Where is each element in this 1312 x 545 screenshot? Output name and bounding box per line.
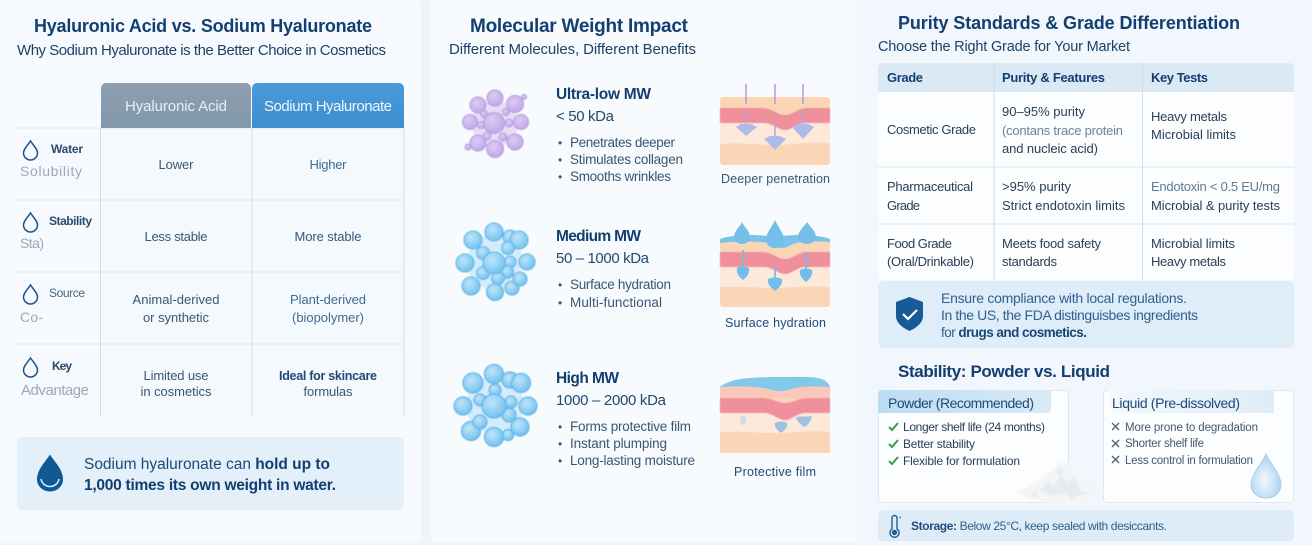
title: Hyaluronic Acid vs. Sodium Hyaluronate: [34, 16, 372, 36]
card: powder: Better stability: [903, 437, 975, 451]
row: medium molecular weight: •: [558, 278, 562, 292]
row: source: Plant-derived: [290, 292, 366, 307]
row: source: or synthetic: [143, 310, 210, 325]
row: source: Source: [49, 286, 85, 300]
icon: thermometer: [890, 516, 901, 537]
storage note: [878, 510, 1294, 541]
row: cosmetic grade: Heavy metals: [1151, 109, 1228, 124]
row: key advantage: Key: [52, 359, 72, 373]
row: food grade: Heavy metals: [1151, 254, 1226, 269]
row: high molecular weight: •: [558, 454, 562, 468]
row: key advantage: in cosmetics: [140, 384, 212, 399]
icon: powder pile: [1017, 462, 1105, 503]
row: ultra-low molecular weight: Stimulates collagen: [570, 152, 683, 167]
row: key advantage: Advantage: [21, 382, 89, 399]
row: key advantage: formulas: [304, 384, 353, 399]
callout: water holding: Sodium hyaluronate can hold up to: [84, 456, 330, 473]
icon: blue molecule cluster: [456, 223, 535, 300]
table header: [887, 70, 1208, 85]
title: Molecular Weight Impact: [470, 16, 689, 37]
card: liquid: Liquid (Pre-dissolved): [1112, 395, 1240, 411]
row: ultra-low molecular weight: •: [558, 153, 562, 167]
row: stability: Stability: [49, 214, 92, 228]
row: key advantage: Ideal for skincare: [279, 369, 377, 383]
icon: shield with check: [896, 297, 923, 331]
row: medium molecular weight: Medium MW: [556, 228, 641, 245]
row: high molecular weight: High MW: [556, 370, 619, 387]
row: source: [20, 285, 366, 325]
card: liquid: More prone to degradation: [1125, 422, 1258, 434]
row: cosmetic grade: [887, 104, 1236, 156]
row: key advantage: [21, 358, 377, 399]
row: ultra-low molecular weight: Smooths wrinkles: [570, 169, 671, 184]
row: high molecular weight: •: [558, 437, 562, 451]
row: food grade: standards: [1002, 254, 1058, 269]
row: cosmetic grade: Microbial limits: [1151, 127, 1236, 142]
row: water solubility: Solubility: [20, 163, 82, 179]
row: cosmetic grade: 90–95% purity: [1002, 104, 1086, 119]
row: ultra-low molecular weight: < 50 kDa: [556, 108, 615, 125]
row: food grade: Food Grade: [887, 236, 952, 251]
subtitle: Different Molecules, Different Benefits: [449, 41, 696, 58]
row: pharmaceutical grade: Grade: [887, 198, 920, 213]
panel: purity standards and stability: [857, 0, 1312, 545]
row: key advantage: Limited use: [144, 368, 208, 383]
icon: x marks: [1112, 423, 1119, 463]
row: ultra-low molecular weight: •: [558, 170, 562, 184]
row: medium molecular weight: •: [558, 296, 562, 310]
callout: water holding: 1,000 times its own weight in water.: [84, 477, 336, 494]
card: powder: Powder (Recommended): [888, 395, 1034, 411]
card: powder: Flexible for formulation: [903, 454, 1020, 468]
row: medium molecular weight: Surface hydration: [570, 277, 671, 292]
row: pharmaceutical grade: Strict endotoxin limits: [1002, 198, 1126, 213]
panel: molecular weight impact: [431, 0, 856, 543]
caption: Surface hydration: [725, 316, 826, 330]
callout: regulatory compliance: In the US, the FDA distinguisbes ingredients: [941, 307, 1198, 323]
row: stability: Sta): [20, 235, 44, 251]
row: food grade: [887, 236, 1236, 269]
row: pharmaceutical grade: [887, 179, 1280, 213]
subtitle: Why Sodium Hyaluronate is the Better Choice in Cosmetics: [17, 42, 386, 59]
row: pharmaceutical grade: >95% purity: [1002, 179, 1072, 194]
row: high molecular weight: Long-lasting moisture: [570, 453, 695, 468]
title: Purity Standards & Grade Differentiation: [898, 13, 1240, 33]
row: food grade: Meets food safety: [1002, 236, 1102, 251]
card: powder: Longer shelf life (24 months): [903, 420, 1045, 434]
row: cosmetic grade: Cosmetic Grade: [887, 122, 976, 137]
row: medium molecular weight: 50 – 1000 kDa: [556, 250, 650, 267]
row: high molecular weight: Forms protective film: [570, 419, 691, 434]
icon: water drop: [24, 141, 38, 160]
icon: stability drop: [24, 213, 38, 232]
header: hyaluronic acid: Hyaluronic Acid: [125, 98, 227, 115]
row: food grade: (Oral/Drinkable): [887, 254, 974, 269]
caption: Deeper penetration: [721, 172, 830, 186]
header: sodium hyaluronate: [252, 83, 404, 128]
row: water solubility: Higher: [310, 157, 347, 172]
row: high molecular weight: 1000 – 2000 kDa: [556, 392, 667, 409]
icon: liquid droplet: [1251, 454, 1281, 498]
skin diagram: deeper penetration: [720, 84, 830, 165]
subtitle: Choose the Right Grade for Your Market: [878, 39, 1130, 55]
icon: source drop: [24, 285, 38, 304]
callout: regulatory compliance: [878, 281, 1294, 348]
card: liquid: Shorter shelf life: [1125, 438, 1204, 450]
icon: solid water drop: [37, 454, 63, 492]
grade table: [878, 63, 1294, 280]
card: liquid: Less control in formulation: [1125, 455, 1253, 467]
row: cosmetic grade: (contans trace protein: [1002, 123, 1123, 138]
row: water solubility: Lower: [158, 157, 194, 172]
icon: large blue molecule cluster: [454, 364, 537, 446]
row: pharmaceutical grade: Pharmaceutical: [887, 179, 973, 194]
callout: water holding: [17, 437, 404, 510]
table header: Purity & Features: [1002, 70, 1105, 85]
row: source: Animal-derived: [132, 292, 220, 307]
card: powder: [878, 390, 1068, 502]
caption: Protective film: [734, 465, 816, 479]
heading: stability: Stability: Powder vs. Liquid: [898, 362, 1110, 381]
icon: green checks: [889, 423, 898, 464]
header: sodium hyaluronate: Sodium Hyaluronate: [264, 98, 392, 115]
row: pharmaceutical grade: Endotoxin < 0.5 EU/mg: [1151, 179, 1280, 194]
callout: regulatory compliance: for drugs and cosmetics.: [941, 325, 1087, 340]
row: stability: Less stable: [144, 229, 208, 244]
panel: hyaluronic acid vs sodium hyaluronate: [0, 0, 421, 543]
card: liquid: [1104, 390, 1294, 502]
row: high molecular weight: •: [558, 420, 562, 434]
row: ultra-low molecular weight: [462, 84, 830, 186]
row: ultra-low molecular weight: •: [558, 136, 562, 150]
row: high molecular weight: Instant plumping: [570, 436, 667, 451]
row: water solubility: Water: [51, 142, 83, 156]
header: hyaluronic acid: [101, 83, 251, 128]
comparison table: [17, 83, 404, 416]
row: stability: [20, 213, 362, 251]
storage note: Storage: Below 25°C, keep sealed with desiccants.: [911, 519, 1167, 533]
table header: Key Tests: [1151, 70, 1208, 85]
icon: purple molecule cluster: [462, 90, 528, 158]
row: source: (biopolymer): [292, 310, 364, 325]
row: ultra-low molecular weight: Ultra-low MW: [556, 86, 651, 103]
row: stability: More stable: [294, 229, 362, 244]
row: high molecular weight: [454, 364, 830, 479]
icon: key advantage drop: [24, 358, 38, 377]
row: source: Co-: [20, 309, 43, 325]
row: food grade: Microbial limits: [1151, 236, 1236, 251]
callout: regulatory compliance: Ensure compliance with local regulations.: [941, 290, 1187, 306]
skin diagram: surface hydration: [720, 220, 830, 307]
skin diagram: protective film: [720, 377, 830, 453]
row: water solubility: [20, 141, 347, 179]
row: medium molecular weight: Multi-functional: [570, 295, 662, 310]
row: ultra-low molecular weight: Penetrates deeper: [570, 135, 676, 150]
table header: Grade: [887, 70, 923, 85]
row: pharmaceutical grade: Microbial & purity tests: [1151, 198, 1280, 213]
row: cosmetic grade: and nucleic acid): [1002, 141, 1098, 156]
row: medium molecular weight: [456, 220, 830, 330]
